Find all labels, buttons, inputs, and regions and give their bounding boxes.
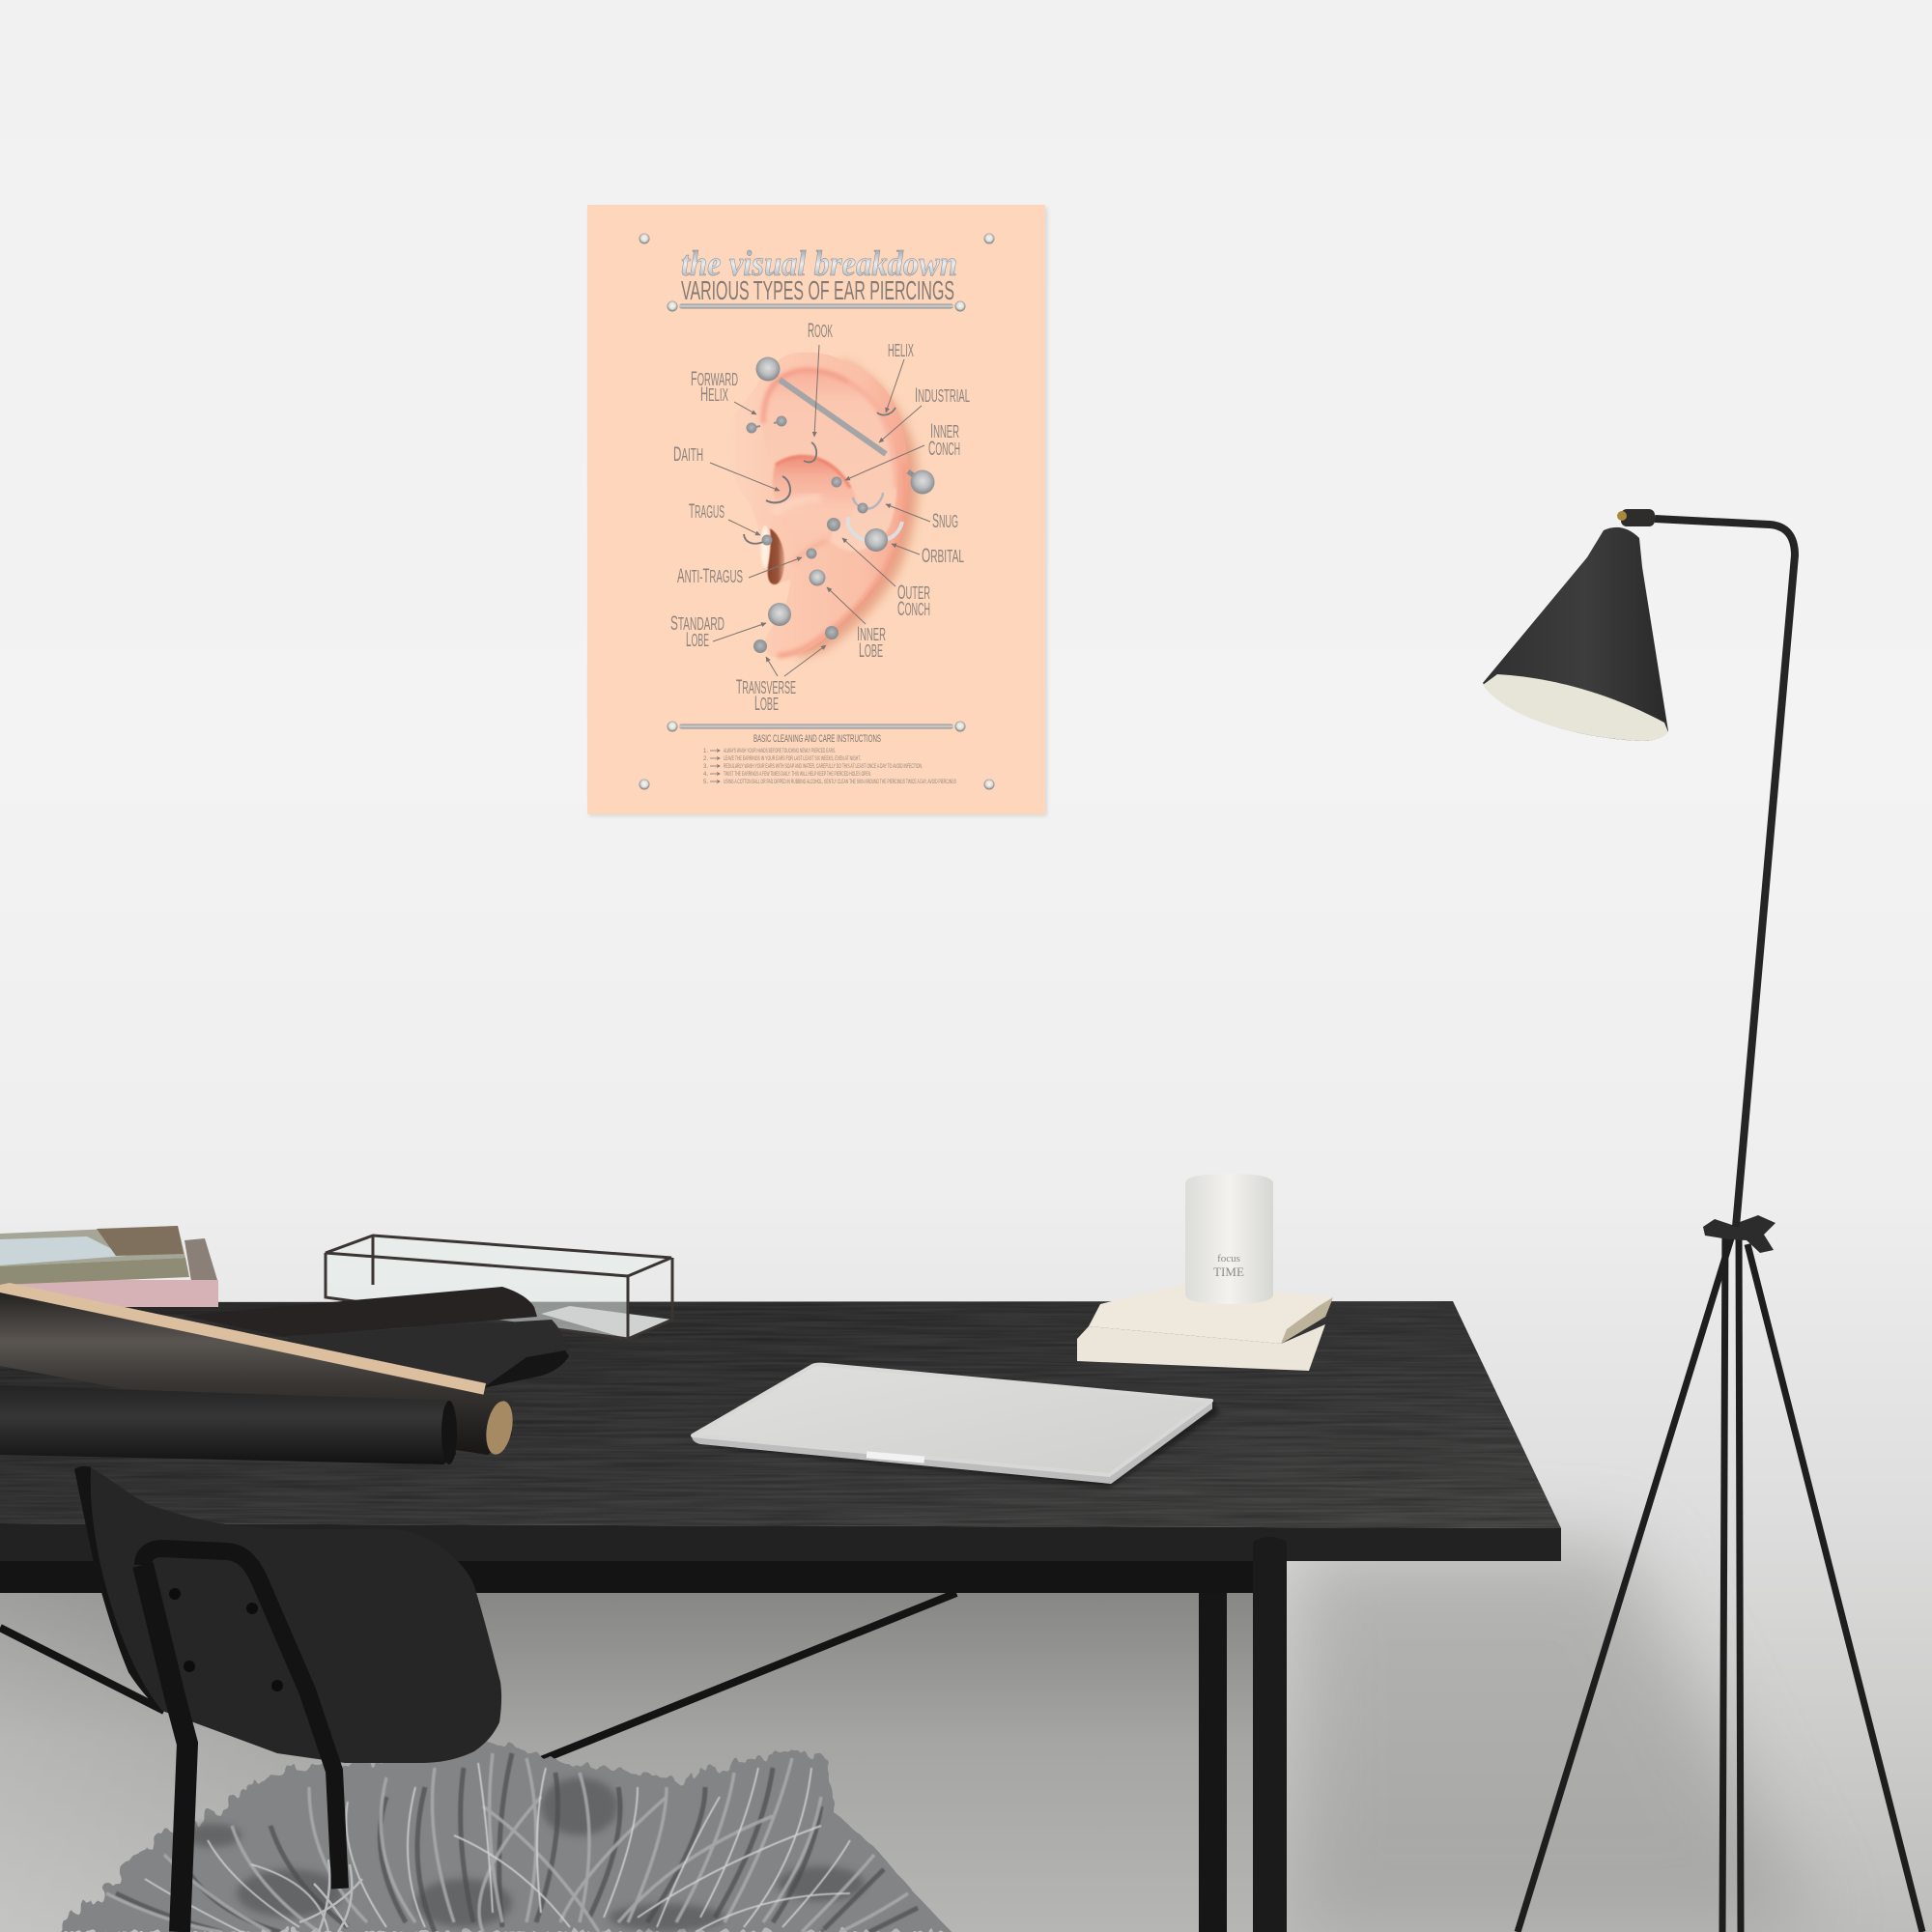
illustration: ear bbox=[726, 353, 918, 659]
list: care instructions: TWIST THE EARRINGS A FEW TIMES DAILY. THIS WILL HELP KEEP THE PIERCED HOLES OPEN. bbox=[724, 772, 871, 778]
piercing: anti-tragus bbox=[806, 549, 817, 558]
table brace: left bbox=[0, 1628, 164, 1711]
label: inner lobe: INNER bbox=[857, 623, 886, 645]
piercing: daith bbox=[766, 476, 790, 502]
label: inner lobe bbox=[857, 623, 886, 662]
label: forward helix: FORWARD bbox=[691, 368, 738, 390]
piercing: transverse lobe bbox=[753, 626, 838, 653]
piercing: inner lobe bbox=[810, 570, 825, 585]
chair frame bbox=[143, 1548, 340, 1932]
lamp arm bbox=[1655, 519, 1795, 1227]
list: care instructions bbox=[703, 749, 956, 785]
piercing: rook bbox=[804, 442, 816, 462]
table back leg bbox=[1199, 1584, 1227, 1932]
label: outer conch bbox=[897, 582, 930, 620]
piercing: forward helix bbox=[746, 415, 786, 433]
title: the visual breakdown bbox=[681, 244, 957, 284]
label: tragus: TRAGUS bbox=[689, 500, 724, 523]
piercing: standard lobe bbox=[768, 603, 791, 626]
mounting pin: top left bbox=[639, 234, 649, 243]
chair back bbox=[74, 1466, 501, 1763]
glass box bbox=[326, 1236, 672, 1339]
label: helix: HELIX bbox=[888, 341, 914, 360]
barbell divider: top bbox=[667, 301, 966, 311]
table front leg bbox=[1253, 1537, 1287, 1932]
label: standard lobe: STANDARD bbox=[670, 612, 724, 635]
label: transverse lobe: TRANSVERSE bbox=[736, 676, 796, 698]
floor lamp bbox=[1483, 509, 1922, 1932]
label: snug: SNUG bbox=[932, 510, 958, 532]
label: anti-tragus: ANTI-TRAGUS bbox=[677, 565, 743, 587]
label: inner conch bbox=[928, 420, 960, 460]
list: care instructions: USING A COTTON BALL OR PAD DIPPED IN RUBBING ALCOHOL, GENTLY CLEAN THE SKIN AROUND THE PIERCINGS TWICE A DAY, AVOID PIERCINGS bbox=[724, 780, 956, 785]
label: inner lobe: LOBE bbox=[859, 639, 883, 662]
mounting pin: top right bbox=[983, 234, 995, 243]
candle: focus bbox=[1217, 1253, 1240, 1264]
books bbox=[0, 1226, 218, 1307]
piercing: inner conch bbox=[831, 477, 842, 487]
list: care instructions: 4. bbox=[703, 772, 708, 778]
lamp tripod legs bbox=[1518, 1227, 1922, 1932]
wall shadow right of the table bbox=[1294, 1546, 1816, 1932]
list: care instructions: LEAVE THE EARRINGS IN YOUR EARS FOR LAST LEAST SIX WEEKS, EVEN AT NIGHT. bbox=[724, 756, 861, 762]
piercing: industrial bbox=[755, 357, 935, 495]
list: care instructions: 5. bbox=[703, 780, 708, 785]
panel: poster bbox=[587, 205, 1047, 816]
area under the table bbox=[0, 1584, 1256, 1932]
label: daith: DAITH bbox=[673, 443, 703, 466]
list: care instructions: ALWAYS WASH YOUR HANDS BEFORE TOUCHING NEWLY PIERCED EARS. bbox=[724, 749, 836, 754]
label: transverse lobe bbox=[736, 676, 796, 715]
fur strands over the chair leg bbox=[299, 1860, 362, 1932]
piercing: snug bbox=[853, 493, 883, 514]
lamp socket bbox=[1617, 509, 1655, 526]
lamp shade bbox=[1483, 527, 1668, 741]
paper rolls bbox=[0, 1283, 569, 1464]
lamp shade interior bbox=[1483, 674, 1668, 741]
piercing: orbital bbox=[848, 517, 902, 552]
candle: TIME bbox=[1213, 1264, 1244, 1279]
table bbox=[0, 1301, 1561, 1593]
label: standard lobe bbox=[670, 612, 724, 651]
fur rug bbox=[55, 1742, 952, 1932]
chair bolts bbox=[169, 1588, 283, 1691]
label: forward helix bbox=[691, 368, 738, 406]
label: orbital: ORBITAL bbox=[922, 545, 964, 567]
lamp clamp bbox=[1703, 1215, 1776, 1253]
label: outer conch: CONCH bbox=[897, 598, 930, 620]
label: standard lobe: LOBE bbox=[686, 629, 709, 651]
heading: care instructions: BASIC CLEANING AND CARE INSTRUCTIONS bbox=[753, 733, 881, 745]
label: rook: ROOK bbox=[808, 320, 833, 342]
label: forward helix: HELIX bbox=[700, 384, 728, 406]
leader lines bbox=[710, 345, 930, 676]
mounting pin: bottom right bbox=[983, 779, 995, 790]
list: care instructions: 1. bbox=[703, 749, 708, 754]
subtitle: VARIOUS TYPES OF EAR PIERCINGS bbox=[681, 275, 954, 305]
label: inner conch: CONCH bbox=[928, 438, 960, 460]
piercing: helix bbox=[877, 408, 895, 415]
label: industrial: INDUSTRIAL bbox=[915, 384, 970, 407]
table brace: right bbox=[541, 1593, 956, 1760]
chair bbox=[74, 1466, 501, 1932]
stacked stones bbox=[1077, 1283, 1333, 1371]
laptop bbox=[693, 1365, 1219, 1488]
piercing: tragus bbox=[744, 534, 773, 545]
list: care instructions: REGULARLY WASH YOUR EARS WITH SOAP AND WATER, CAREFULLY DO THIS AT LEAST ONCE A DAY TO AVOID INFECTION. bbox=[724, 764, 923, 770]
list: care instructions: 2. bbox=[703, 756, 708, 762]
label: transverse lobe: LOBE bbox=[754, 693, 779, 715]
label: inner conch: INNER bbox=[930, 420, 959, 442]
mounting pin: bottom left bbox=[639, 779, 649, 790]
list: care instructions: 3. bbox=[703, 764, 708, 770]
label: outer conch: OUTER bbox=[897, 582, 930, 604]
barbell divider: bottom bbox=[667, 721, 966, 732]
candle bbox=[1185, 1174, 1273, 1304]
piercing: outer conch bbox=[827, 518, 840, 531]
